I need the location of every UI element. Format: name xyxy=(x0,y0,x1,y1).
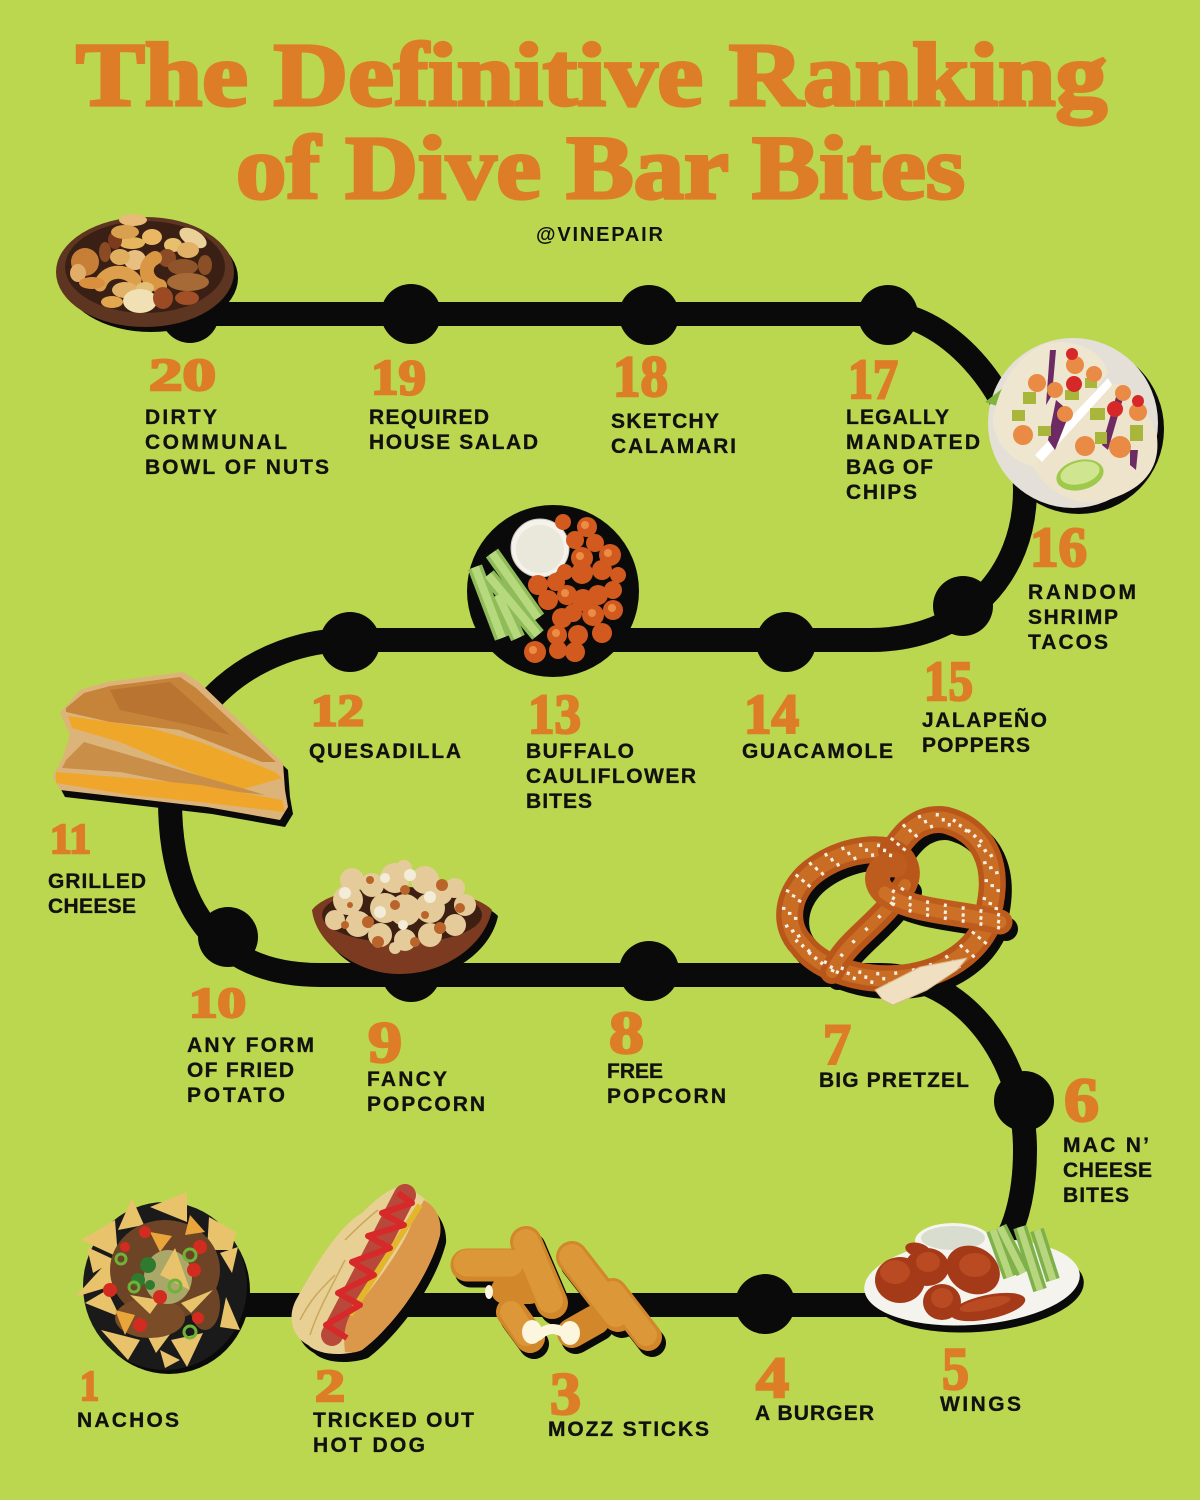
rank 5: wings: 5 xyxy=(942,1336,969,1402)
rank 12: quesadilla: QUESADILLA xyxy=(309,740,461,763)
rank 13: buffalo cauliflower bites: CAULIFLOWER xyxy=(526,765,696,788)
rank 5: wings: WINGS xyxy=(940,1393,1021,1416)
food: buffalo cauliflower plate xyxy=(467,505,639,677)
food: hot dog xyxy=(292,1187,446,1362)
rank 6: mac n' cheese bites: 6 xyxy=(1064,1067,1099,1135)
rank 3: mozz sticks: MOZZ STICKS xyxy=(548,1418,709,1441)
rank 3: mozz sticks xyxy=(548,1361,709,1441)
rank 8: free popcorn xyxy=(607,1000,726,1108)
rank 18: sketchy calamari: SKETCHY xyxy=(611,410,719,433)
rank 19: required house salad: HOUSE SALAD xyxy=(369,431,538,454)
rank 12: quesadilla: 12 xyxy=(311,686,364,735)
rank 9: fancy popcorn: POPCORN xyxy=(367,1093,485,1116)
title: of Dive Bar Bites xyxy=(236,119,965,218)
rank 8: free popcorn: FREE xyxy=(607,1060,663,1083)
rank 20: dirty communal bowl of nuts: 20 xyxy=(149,349,216,400)
rank 7: big pretzel: 7 xyxy=(823,1012,851,1077)
rank 17: legally mandated bag of chips xyxy=(846,349,980,504)
rank 16: random shrimp tacos: RANDOM xyxy=(1028,581,1136,604)
rank 16: random shrimp tacos: 16 xyxy=(1030,517,1087,579)
food: nachos xyxy=(75,1192,250,1374)
rank 6: mac n' cheese bites xyxy=(1063,1067,1152,1207)
rank 20: dirty communal bowl of nuts: COMMUNAL xyxy=(145,431,287,454)
rank 20: dirty communal bowl of nuts xyxy=(145,349,329,479)
rank 13: buffalo cauliflower bites: BUFFALO xyxy=(526,740,634,763)
rank 11: grilled cheese: GRILLED xyxy=(48,870,146,893)
rank 6: mac n' cheese bites: BITES xyxy=(1063,1184,1129,1207)
food: shrimp tacos plate xyxy=(985,338,1164,514)
rank 17: legally mandated bag of chips: 17 xyxy=(848,349,898,411)
rank 16: random shrimp tacos: SHRIMP xyxy=(1028,606,1118,629)
rank 17: legally mandated bag of chips: LEGALLY xyxy=(846,406,949,429)
rank 7: big pretzel xyxy=(819,1012,969,1092)
rank 2: tricked out hot dog: 2 xyxy=(315,1360,345,1411)
rank 2: tricked out hot dog: TRICKED OUT xyxy=(313,1409,474,1432)
winding track xyxy=(170,314,1025,1305)
title: The Definitive Ranking xyxy=(76,26,1107,125)
rank 4: a burger xyxy=(755,1345,874,1425)
rank 10: any form of fried potato: 10 xyxy=(189,981,246,1027)
food: mozzarella sticks xyxy=(467,1242,652,1345)
rank 19: required house salad: 19 xyxy=(371,349,426,405)
food: bowl of nuts xyxy=(56,214,238,332)
rank 15: jalapeno poppers: 15 xyxy=(924,651,973,713)
rank 16: random shrimp tacos: TACOS xyxy=(1028,631,1108,654)
rank 1: nachos: 1 xyxy=(80,1364,99,1410)
rank 11: grilled cheese xyxy=(48,817,146,918)
rank 15: jalapeno poppers: POPPERS xyxy=(922,734,1030,757)
rank 11: grilled cheese: CHEESE xyxy=(48,895,136,918)
rank 19: required house salad xyxy=(369,349,538,454)
rank 8: free popcorn: POPCORN xyxy=(607,1085,726,1108)
rank 17: legally mandated bag of chips: CHIPS xyxy=(846,481,917,504)
food: grilled cheese xyxy=(53,672,293,827)
rank 10: any form of fried potato xyxy=(187,981,314,1107)
rank 4: a burger: A BURGER xyxy=(755,1402,874,1425)
rank 18: sketchy calamari xyxy=(611,344,736,458)
rank 15: jalapeno poppers: JALAPEÑO xyxy=(922,709,1047,732)
rank 18: sketchy calamari: CALAMARI xyxy=(611,435,736,458)
rank 20: dirty communal bowl of nuts: DIRTY xyxy=(145,406,217,429)
rank 13: buffalo cauliflower bites xyxy=(526,684,696,813)
rank 1: nachos xyxy=(77,1364,179,1432)
rank 10: any form of fried potato: ANY FORM xyxy=(187,1034,314,1057)
rank 2: tricked out hot dog: HOT DOG xyxy=(313,1434,425,1457)
rank 14: guacamole: 14 xyxy=(744,684,799,746)
rank 17: legally mandated bag of chips: MANDATED xyxy=(846,431,980,454)
rank 3: mozz sticks: 3 xyxy=(550,1361,581,1427)
rank 6: mac n' cheese bites: MAC N’ xyxy=(1063,1134,1149,1157)
rank 4: a burger: 4 xyxy=(756,1345,789,1410)
rank 9: fancy popcorn: FANCY xyxy=(367,1068,447,1091)
rank 2: tricked out hot dog xyxy=(313,1360,474,1457)
rank 6: mac n' cheese bites: CHEESE xyxy=(1063,1159,1152,1182)
rank 18: sketchy calamari: 18 xyxy=(613,344,668,409)
rank 8: free popcorn: 8 xyxy=(609,1000,644,1066)
rank 13: buffalo cauliflower bites: BITES xyxy=(526,790,592,813)
rank 10: any form of fried potato: OF FRIED xyxy=(187,1059,294,1082)
rank 9: fancy popcorn xyxy=(367,1010,485,1116)
rank 14: guacamole: GUACAMOLE xyxy=(742,740,893,763)
rank 9: fancy popcorn: 9 xyxy=(368,1010,402,1075)
title xyxy=(76,26,1107,218)
rank 10: any form of fried potato: POTATO xyxy=(187,1084,285,1107)
rank 17: legally mandated bag of chips: BAG OF xyxy=(846,456,933,479)
rank 14: guacamole xyxy=(742,684,893,763)
rank 1: nachos: NACHOS xyxy=(77,1409,179,1432)
rank 16: random shrimp tacos xyxy=(1028,517,1136,654)
rank 20: dirty communal bowl of nuts: BOWL OF NUTS xyxy=(145,456,329,479)
food: big pretzel xyxy=(784,815,1006,1005)
track stops xyxy=(161,284,1054,1334)
rank 19: required house salad: REQUIRED xyxy=(369,406,489,429)
credit: @VINEPAIR: @VINEPAIR xyxy=(536,224,664,246)
rank 13: buffalo cauliflower bites: 13 xyxy=(528,684,581,746)
rank 5: wings xyxy=(940,1336,1021,1416)
rank 7: big pretzel: BIG PRETZEL xyxy=(819,1069,969,1092)
food: popcorn bowl xyxy=(312,860,498,980)
rank 15: jalapeno poppers xyxy=(922,651,1047,757)
food: chicken wings plate xyxy=(861,1223,1087,1339)
rank 12: quesadilla xyxy=(309,686,461,763)
rank 11: grilled cheese: 11 xyxy=(50,817,91,863)
